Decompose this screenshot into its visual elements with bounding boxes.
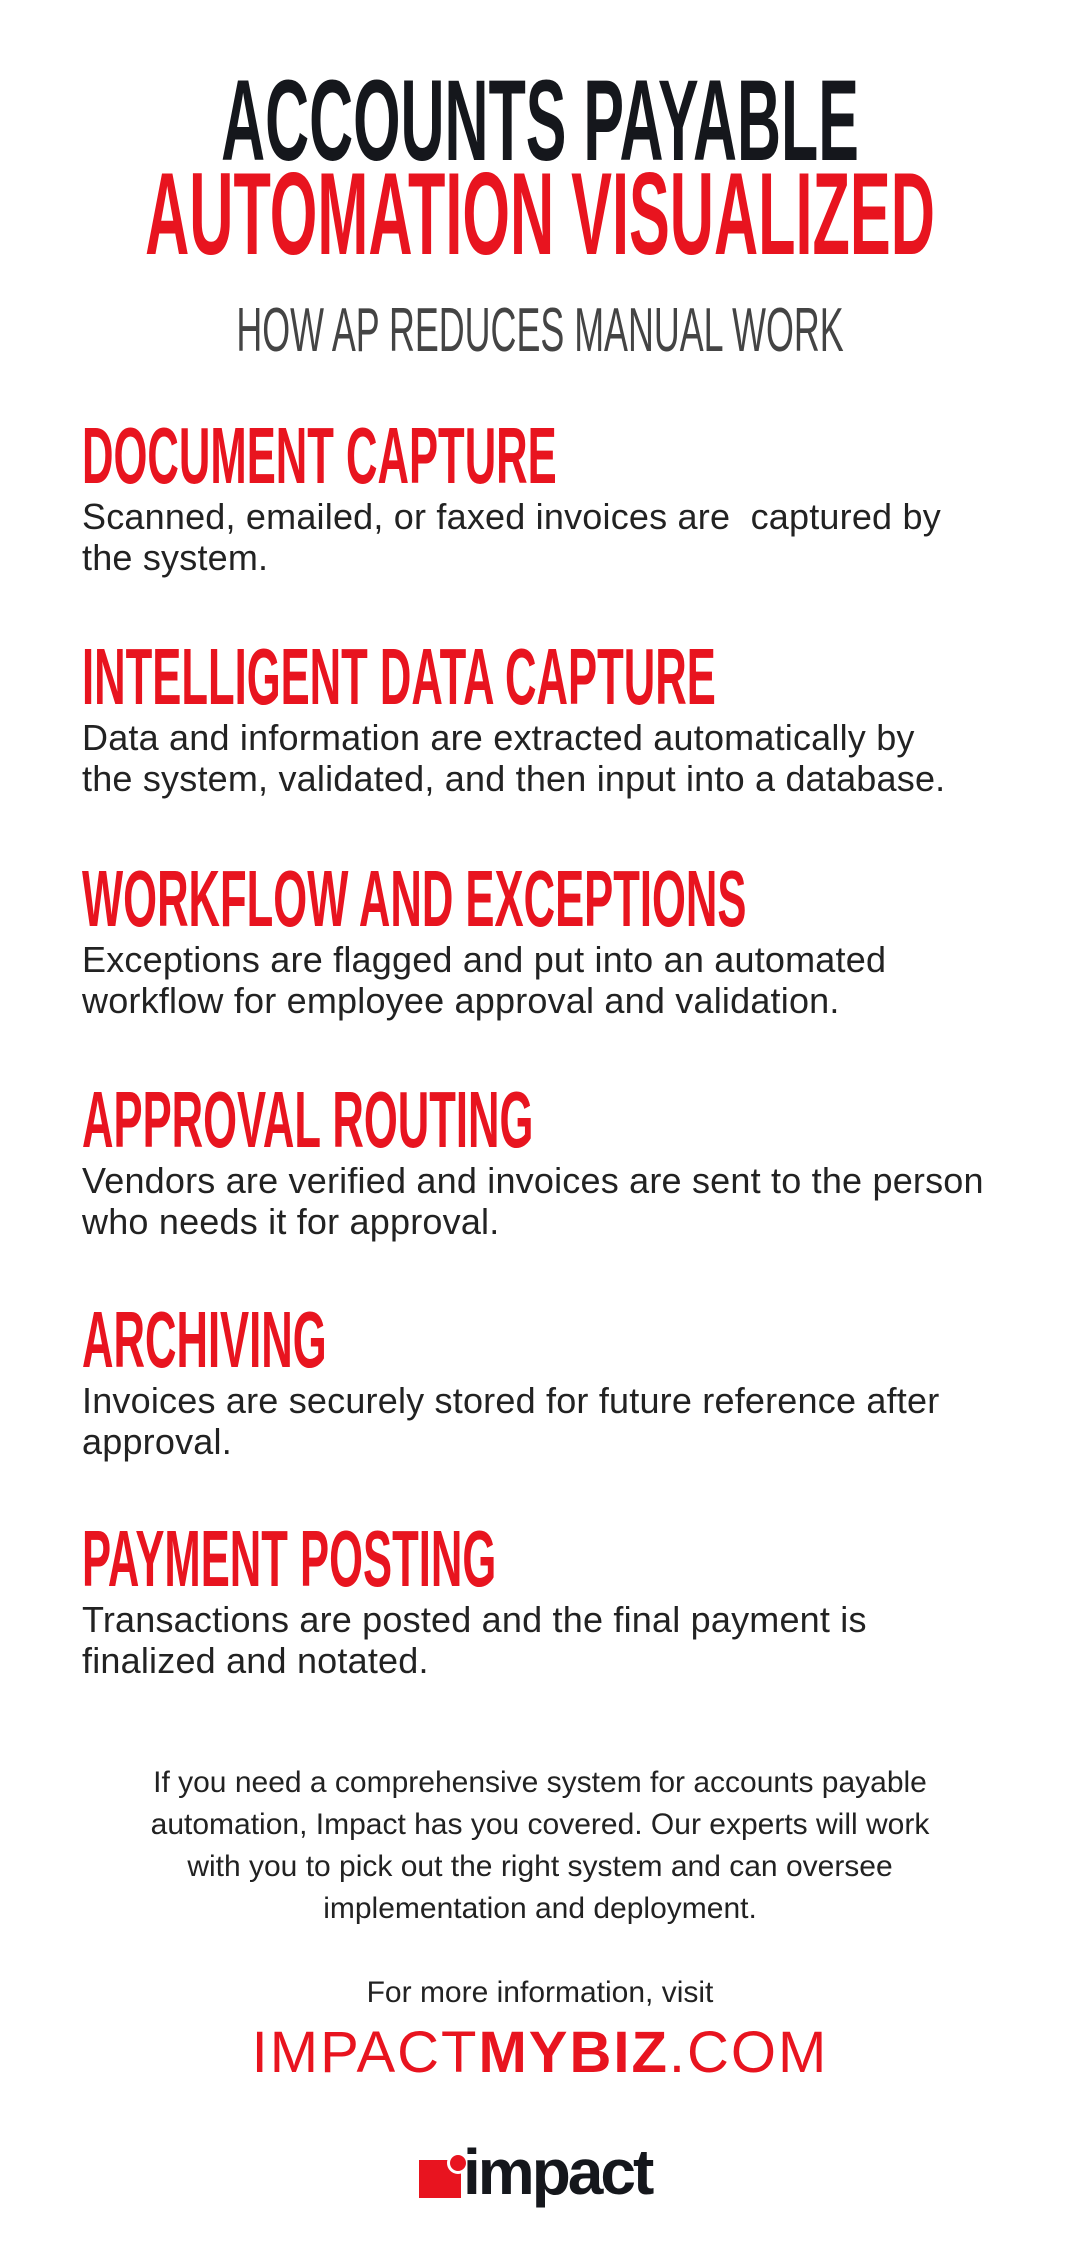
heading: DOCUMENT CAPTURE xyxy=(82,411,557,500)
heading: WORKFLOW AND EXCEPTIONS xyxy=(82,854,746,943)
icon: red square with dot xyxy=(419,2160,461,2198)
heading: INTELLIGENT DATA CAPTURE xyxy=(82,632,716,721)
body text xyxy=(82,717,945,799)
body text: workflow for employee approval and validation. xyxy=(82,980,840,1021)
logo: impact xyxy=(419,2136,654,2208)
closing paragraph: implementation and deployment. xyxy=(323,1892,757,1925)
body text xyxy=(82,1380,939,1462)
body text: the system. xyxy=(82,537,268,578)
body text: finalized and notated. xyxy=(82,1640,429,1681)
body text xyxy=(82,1599,867,1681)
closing paragraph: with you to pick out the right system and can oversee xyxy=(187,1850,893,1883)
website url: IMPACTMYBIZ.COM xyxy=(252,2020,828,2085)
logo wordmark: impact xyxy=(463,2136,651,2208)
body text: the system, validated, and then input into a database. xyxy=(82,758,945,799)
closing paragraph: automation, Impact has you covered. Our experts will work xyxy=(151,1808,929,1841)
body text xyxy=(82,1160,984,1242)
section: document capture xyxy=(82,411,941,578)
heading: PAYMENT POSTING xyxy=(82,1514,496,1603)
section: intelligent data capture xyxy=(82,632,945,799)
body text: Scanned, emailed, or faxed invoices are captured by xyxy=(82,496,941,537)
body text: Transactions are posted and the final payment is xyxy=(82,1599,867,1640)
title line 1: ACCOUNTS PAYABLE xyxy=(221,57,859,185)
body text xyxy=(82,496,941,578)
title line 2: AUTOMATION VISUALIZED xyxy=(145,148,935,279)
heading: APPROVAL ROUTING xyxy=(82,1075,533,1164)
subtitle: HOW AP REDUCES MANUAL WORK xyxy=(236,296,844,365)
call to action text: For more information, visit xyxy=(367,1976,713,2009)
section: payment posting xyxy=(82,1514,867,1681)
section: workflow and exceptions xyxy=(82,854,886,1021)
body text: Data and information are extracted automatically by xyxy=(82,717,915,758)
body text: Invoices are securely stored for future reference after xyxy=(82,1380,939,1421)
section: approval routing xyxy=(82,1075,984,1242)
body text: Vendors are verified and invoices are sent to the person xyxy=(82,1160,984,1201)
closing paragraph: If you need a comprehensive system for accounts payable xyxy=(153,1766,927,1799)
closing paragraph xyxy=(151,1766,930,1925)
body text: who needs it for approval. xyxy=(82,1201,499,1242)
section: archiving xyxy=(82,1295,939,1462)
body text: Exceptions are flagged and put into an automated xyxy=(82,939,886,980)
body text: approval. xyxy=(82,1421,232,1462)
heading: ARCHIVING xyxy=(82,1295,327,1384)
body text xyxy=(82,939,886,1021)
